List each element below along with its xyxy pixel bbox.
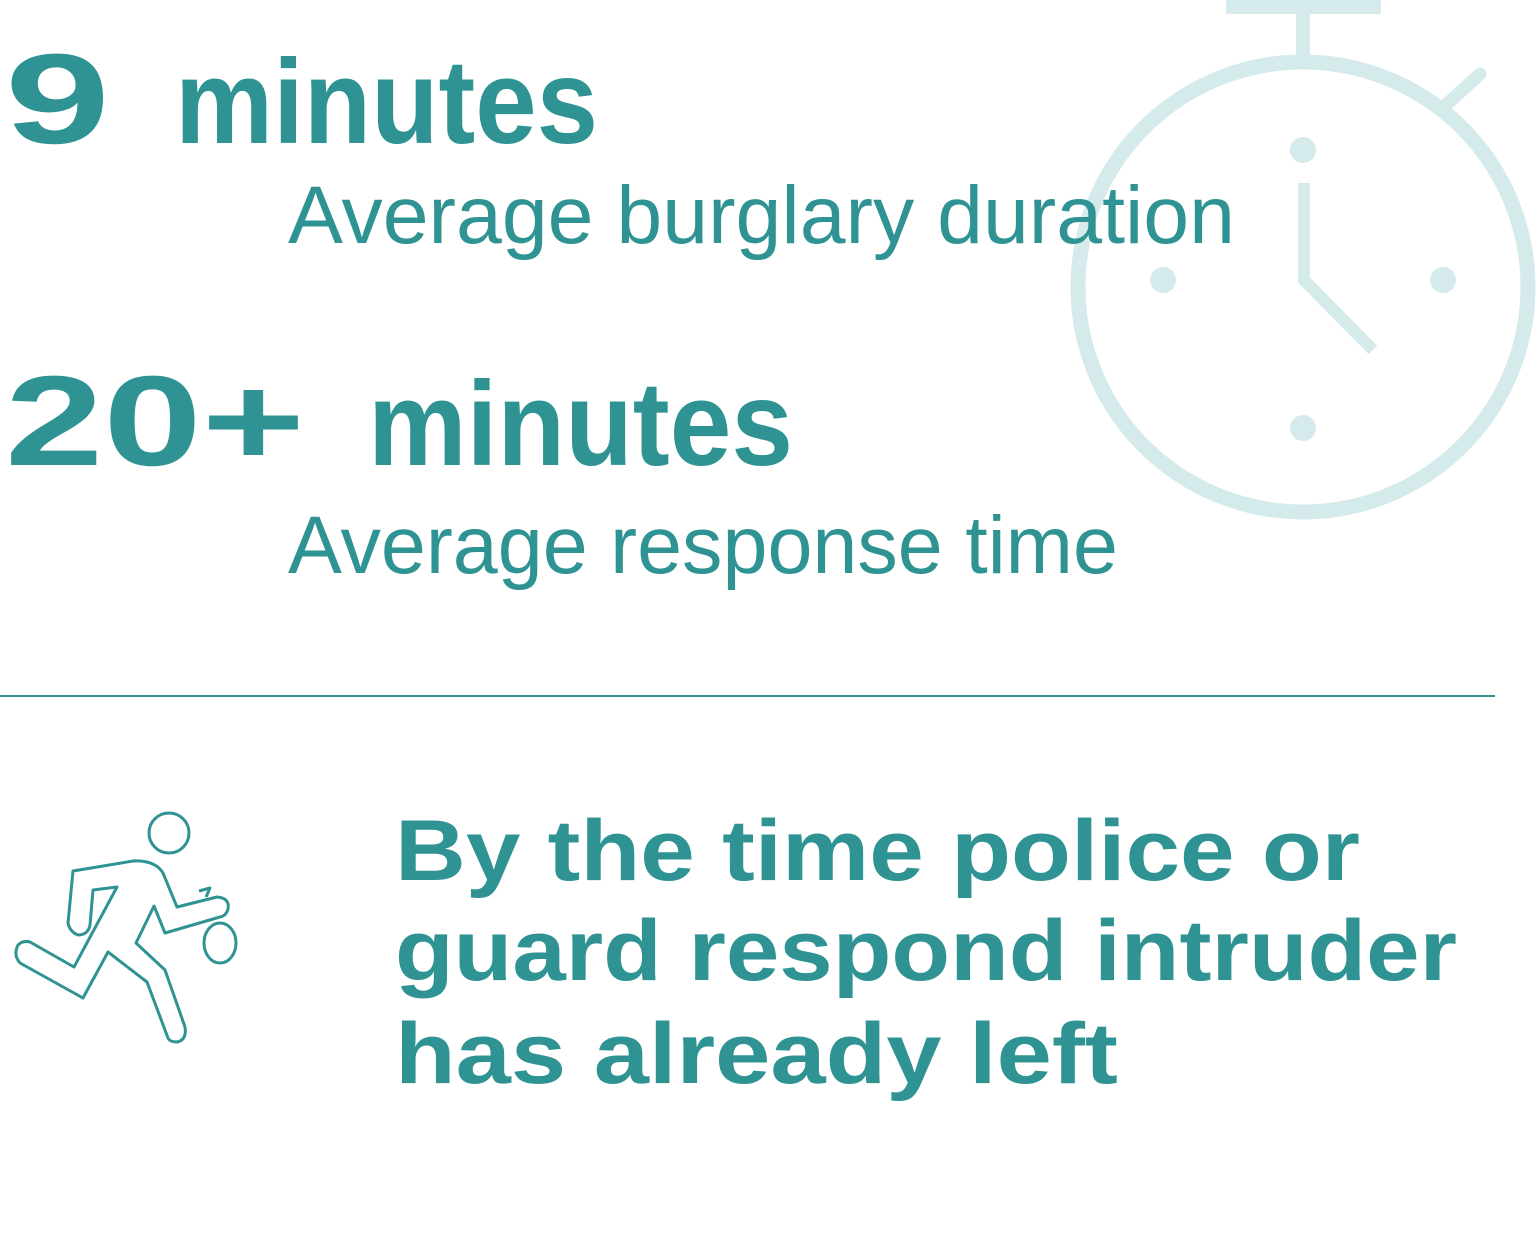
stat: 20+ minutes: 20+	[5, 350, 305, 493]
icon: running intruder	[16, 813, 236, 1042]
text: conclusion	[395, 803, 1457, 1102]
label: average response time: Average response time	[288, 500, 1118, 591]
stat: 9 minutes: minutes	[175, 35, 598, 169]
text: conclusion: By the time police or	[395, 803, 1360, 899]
text: conclusion: has already left	[395, 1006, 1118, 1102]
text: conclusion: guard respond intruder	[395, 903, 1457, 999]
stat: 9 minutes	[5, 28, 598, 171]
stat: 20+ minutes: minutes	[368, 357, 793, 491]
icon: stopwatch	[1078, 0, 1528, 512]
label: average burglary duration: Average burglary duration	[288, 170, 1235, 261]
stat: 20+ minutes	[5, 350, 793, 493]
stat: 9 minutes: 9	[5, 28, 110, 171]
